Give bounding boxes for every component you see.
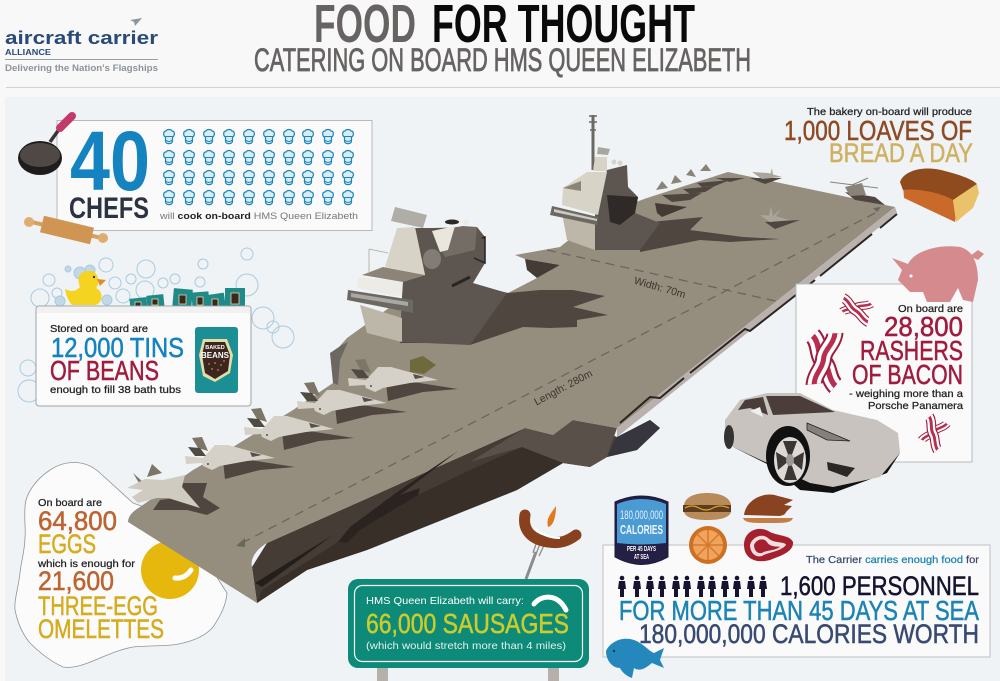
icon: bacon rashers — [809, 296, 948, 450]
logo: Aircraft Carrier Alliance: Delivering the Nation's Flagships — [5, 63, 158, 73]
panel: bacon — [796, 284, 972, 462]
panel: sausages road sign — [348, 579, 589, 668]
eggs text: which is enough for — [37, 558, 136, 570]
sign posts — [377, 668, 559, 681]
icon: baked beans can — [195, 327, 238, 393]
deck vehicle — [410, 356, 436, 374]
beans text: OF BEANS — [50, 355, 159, 386]
panel: eggs — [15, 462, 227, 667]
icon: rubber duck — [65, 271, 106, 305]
icon: steak — [744, 529, 793, 561]
eggs text: EGGS — [38, 529, 96, 559]
eggs text: 21,600 — [38, 566, 114, 596]
bakery text — [784, 106, 973, 168]
eggs text: 64,800 — [38, 506, 117, 536]
panel: beans — [36, 306, 251, 406]
title — [254, 0, 751, 78]
icon: pig — [892, 246, 984, 302]
bacon text — [849, 303, 963, 412]
40 chefs headline: CHEFS — [69, 192, 149, 225]
hull — [252, 420, 660, 603]
logo: Aircraft Carrier Alliance — [5, 18, 158, 73]
jets along port side — [127, 359, 458, 515]
jet 3 — [244, 408, 354, 450]
forward island — [550, 115, 660, 250]
sausages text: 66,000 SAUSAGES — [366, 608, 569, 639]
icon row: personnel — [618, 576, 767, 597]
icon: calories badge: PER 45 DAYS — [627, 546, 656, 553]
deck shadows — [400, 285, 608, 345]
icon: rolling pin — [24, 217, 108, 243]
bacon text: RASHERS — [860, 335, 963, 366]
bacon text: On board are — [898, 303, 963, 315]
aircraft carrier ship — [127, 115, 897, 603]
panel: chefs — [57, 114, 372, 230]
icon: frying pan — [18, 116, 72, 175]
icon: bean tins in bath — [129, 288, 245, 311]
starboard edge strip — [617, 207, 897, 437]
eggs text — [37, 497, 164, 644]
icon: calories badge: CALORIES — [620, 522, 663, 537]
eggs text: On board are — [38, 497, 102, 509]
flight deck — [128, 172, 895, 603]
sausages text: (which would stretch more than 4 miles) — [366, 640, 566, 652]
panel: calories — [603, 545, 990, 657]
aft island — [347, 207, 507, 345]
logo: Aircraft Carrier Alliance: aircraft carrier — [5, 28, 158, 48]
icon: egg yolk — [141, 541, 199, 599]
icon: calories badge: 180,000,000 — [620, 508, 663, 522]
bacon text: OF BACON — [852, 359, 963, 390]
label: length: Length: 280m — [532, 367, 595, 408]
chefs caption: will cook on-board HMS Queen Elizabeth — [159, 211, 358, 222]
icon: roast turkey — [743, 495, 793, 523]
bubbles — [18, 248, 294, 402]
logo: Aircraft Carrier Alliance: ALLIANCE — [5, 48, 52, 57]
title: CATERING ON BOARD HMS QUEEN ELIZABETH — [254, 42, 751, 78]
beans text: Stored on board are — [50, 323, 148, 335]
calories text: The Carrier carries enough food for — [806, 554, 980, 566]
icon: hot dog — [683, 493, 731, 520]
jet 4 — [297, 382, 407, 424]
icon: calories badge — [615, 496, 668, 564]
runway dashes — [242, 212, 877, 543]
icon: baked beans can: BEANS — [201, 351, 230, 360]
jet 1 bow — [127, 464, 220, 515]
icon: Porsche car — [724, 393, 900, 493]
eggs text: OMELETTES — [38, 614, 164, 644]
icon: sausage on fork — [525, 506, 576, 579]
label: width: Width: 70m — [633, 275, 687, 301]
sponson undersides — [525, 203, 687, 278]
bacon text: - weighing more than a — [849, 388, 963, 400]
beans text — [50, 323, 184, 396]
bacon text: 28,800 — [884, 311, 963, 342]
eggs text: THREE-EGG — [38, 591, 158, 621]
jet 2 — [185, 437, 295, 479]
far aircraft on stern deck — [656, 164, 885, 229]
40 chefs headline: 40 — [70, 114, 150, 208]
sausages text: HMS Queen Elizabeth will carry: — [366, 595, 524, 607]
icon: loaf of bread — [900, 168, 979, 222]
beans text: enough to fill 38 bath tubs — [50, 384, 181, 396]
icon: orange slice — [689, 526, 727, 564]
chef icon grid — [164, 130, 353, 205]
bacon text: Porsche Panamera — [868, 400, 963, 412]
bow ramp slash — [338, 451, 458, 543]
jet 5 — [348, 359, 458, 401]
calories text — [619, 554, 980, 649]
icon: calories badge: AT SEA — [634, 554, 649, 561]
icon: blue fish — [606, 639, 664, 678]
icon: baked beans can: BAKED — [205, 345, 225, 351]
sausages text — [366, 595, 569, 652]
icon: sign arc — [534, 597, 566, 610]
beans text: 12,000 TINS — [51, 332, 184, 363]
bakery text: The bakery on-board will produce — [807, 106, 972, 118]
